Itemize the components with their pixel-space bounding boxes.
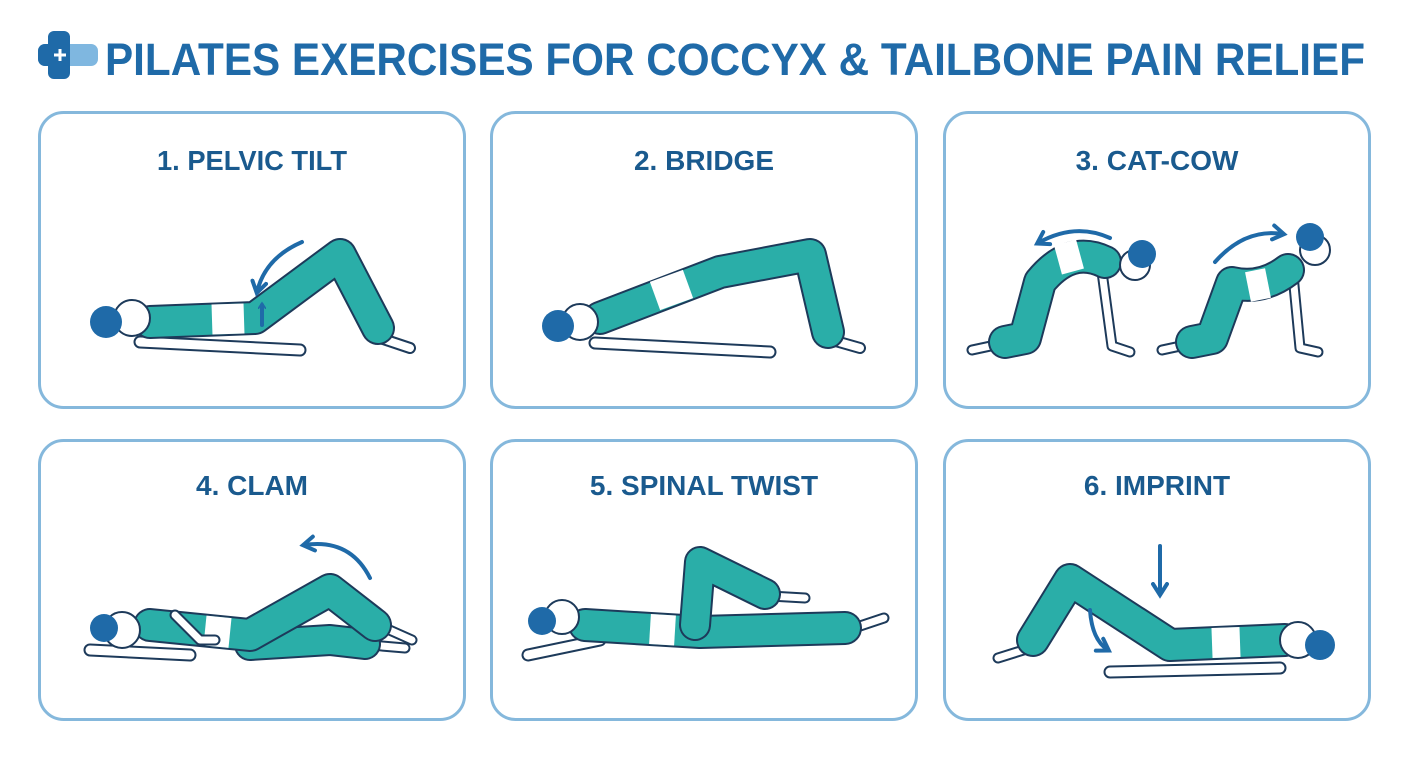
heading: imprint: 6. IMPRINT: [1084, 470, 1230, 501]
panel: bridge: [492, 112, 916, 408]
heading: spinal twist: 5. SPINAL TWIST: [590, 470, 818, 501]
figure: cat: [972, 231, 1156, 352]
heading: pelvic tilt: 1. PELVIC TILT: [157, 145, 347, 176]
figure: pelvic tilt: [90, 242, 410, 350]
heading: bridge: 2. BRIDGE: [634, 145, 774, 176]
figure: bridge: [542, 255, 860, 352]
figure: cow: [1162, 223, 1330, 352]
panel: clam: [40, 440, 464, 720]
heading: clam: 4. CLAM: [196, 470, 308, 501]
panel: pelvic tilt: [40, 112, 464, 408]
panel: imprint: [944, 440, 1370, 720]
icon: medical cross: [38, 31, 98, 79]
figure: imprint: [998, 546, 1335, 672]
panel: cat-cow: [944, 112, 1370, 408]
figure: spinal twist: [528, 562, 884, 655]
figure: clam: [90, 544, 412, 655]
panel: spinal twist: [492, 440, 916, 720]
heading: cat-cow: 3. CAT-COW: [1076, 145, 1239, 176]
title: PILATES EXERCISES FOR COCCYX & TAILBONE PAIN RELIEF: [105, 34, 1365, 85]
